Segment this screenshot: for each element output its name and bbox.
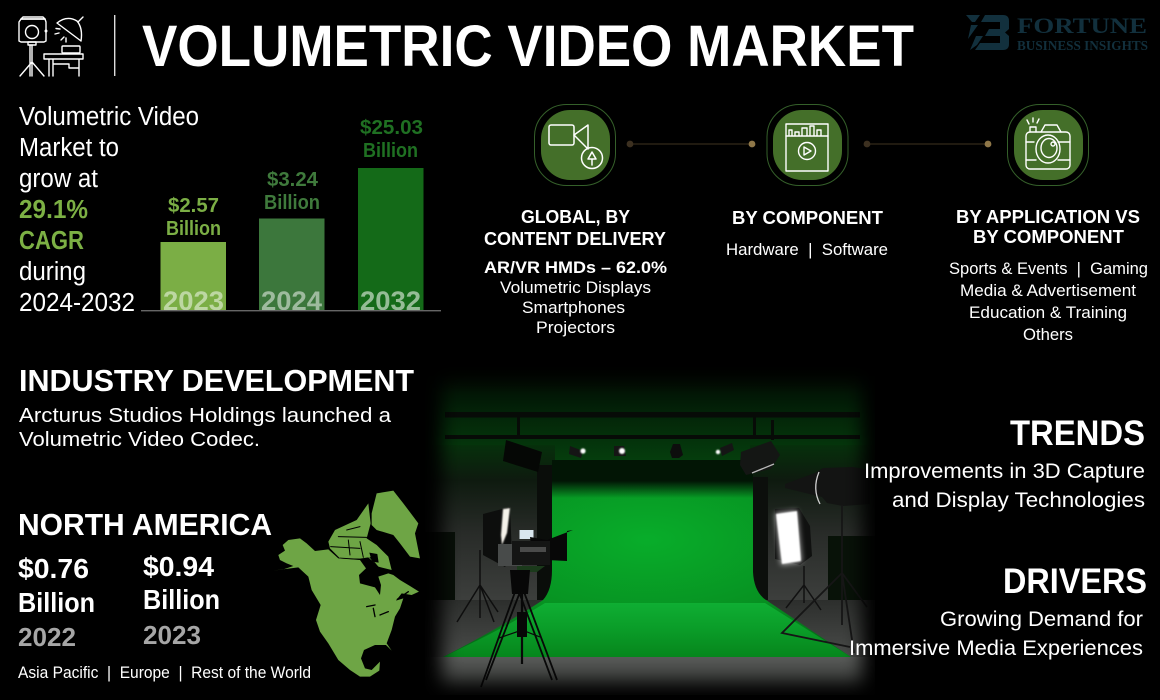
heading bbox=[484, 207, 666, 249]
list bbox=[949, 260, 1148, 344]
growth statement: 29.1% bbox=[19, 196, 88, 224]
value 2022: $0.76 bbox=[18, 553, 89, 584]
studio photo bbox=[390, 340, 920, 700]
growth statement bbox=[19, 103, 199, 317]
value 2023: Billion bbox=[143, 584, 220, 615]
heading: INDUSTRY DEVELOPMENT bbox=[19, 363, 414, 398]
logo tagline: BUSINESS INSIGHTS bbox=[1017, 38, 1148, 53]
right fresnel on stand bbox=[782, 467, 870, 653]
bar 2032 bbox=[358, 116, 424, 316]
body text: Immersive Media Experiences bbox=[849, 636, 1143, 660]
growth statement: 2024-2032 bbox=[19, 289, 135, 317]
right softbox bbox=[775, 508, 821, 610]
panel: industry development bbox=[19, 363, 414, 451]
left barn door light bbox=[503, 440, 542, 472]
value 2023: 2023 bbox=[143, 620, 201, 650]
grey floor strip bbox=[425, 657, 875, 695]
panel: drivers bbox=[849, 562, 1147, 660]
icon: photo camera bbox=[1008, 104, 1088, 186]
heading: NORTH AMERICA bbox=[18, 507, 272, 542]
connector 2 bbox=[864, 141, 991, 147]
list bbox=[484, 259, 667, 337]
bar 2023: 2023 bbox=[163, 286, 224, 316]
value 2022: 2022 bbox=[18, 622, 76, 652]
growth statement: grow at bbox=[19, 165, 98, 193]
value 2022: Billion bbox=[18, 587, 95, 618]
logo wordmark: FORTUNE bbox=[1017, 13, 1147, 38]
right cyclorama frame bbox=[752, 477, 768, 600]
body text: Arcturus Studios Holdings launched a bbox=[19, 404, 392, 427]
icon: media player bbox=[767, 104, 848, 186]
side floor bbox=[425, 600, 875, 660]
heading: BY APPLICATION VS bbox=[956, 207, 1140, 227]
other regions: Asia Pacific | Europe | Rest of the World bbox=[18, 664, 311, 682]
bar 2032: 2032 bbox=[360, 286, 421, 316]
panel: north america bbox=[18, 491, 420, 682]
list: Hardware | Software bbox=[726, 241, 888, 259]
body text: Volumetric Video Codec. bbox=[19, 428, 260, 451]
cinema camera on tripod bbox=[481, 530, 573, 687]
panel: trends bbox=[864, 414, 1145, 512]
heading: BY COMPONENT bbox=[973, 227, 1124, 247]
connector 1 bbox=[627, 141, 755, 147]
list: Media & Advertisement bbox=[960, 282, 1136, 300]
value 2023: $0.94 bbox=[143, 551, 214, 582]
map of North America bbox=[273, 491, 420, 677]
body text bbox=[849, 607, 1143, 660]
left softbox bbox=[457, 507, 512, 622]
bar 2023: $2.57 bbox=[168, 194, 219, 217]
growth statement: Market to bbox=[19, 134, 119, 162]
growth statement: during bbox=[19, 258, 86, 286]
bar 2024: Billion bbox=[264, 191, 320, 214]
title: VOLUMETRIC VIDEO MARKET bbox=[142, 14, 914, 79]
ceiling spotlights bbox=[503, 440, 780, 475]
icon: video camera bbox=[534, 104, 616, 186]
growth statement: CAGR bbox=[19, 227, 84, 255]
green screen backdrop bbox=[443, 477, 851, 657]
body text: and Display Technologies bbox=[892, 488, 1145, 512]
bar 2032: $25.03 bbox=[360, 116, 423, 139]
heading: CONTENT DELIVERY bbox=[484, 229, 666, 249]
bar 2024 bbox=[259, 168, 324, 316]
left dark wall panel bbox=[425, 532, 455, 612]
body text: Improvements in 3D Capture bbox=[864, 459, 1145, 483]
left cyclorama frame bbox=[537, 465, 553, 600]
list: Education & Training bbox=[969, 304, 1127, 322]
body text bbox=[864, 459, 1145, 512]
green floor bbox=[443, 603, 851, 657]
value 2023 bbox=[143, 551, 220, 650]
heading: BY COMPONENT bbox=[732, 208, 883, 228]
heading: TRENDS bbox=[1010, 414, 1145, 453]
bar 2023: Billion bbox=[166, 217, 221, 240]
logo mark bbox=[966, 15, 1009, 50]
left studio wall bbox=[425, 445, 555, 605]
bar 2032: Billion bbox=[363, 139, 418, 162]
logo: Fortune Business Insights bbox=[966, 13, 1148, 53]
body text: Growing Demand for bbox=[940, 607, 1143, 631]
right fresnel light bbox=[740, 441, 780, 475]
growth statement: Volumetric Video bbox=[19, 103, 199, 131]
right dark wall panel bbox=[828, 536, 875, 612]
header icon: camera, lamp and desk bbox=[19, 17, 83, 76]
list: Volumetric Displays bbox=[500, 279, 651, 297]
panel: by component bbox=[726, 104, 888, 259]
bar chart bbox=[141, 116, 441, 316]
value 2022 bbox=[18, 553, 95, 652]
list: Sports & Events | Gaming bbox=[949, 260, 1148, 278]
heading: GLOBAL, BY bbox=[521, 207, 630, 227]
upper studio green wall bbox=[425, 360, 875, 480]
list: Smartphones bbox=[522, 299, 625, 317]
list: AR/VR HMDs – 62.0% bbox=[484, 259, 667, 277]
right studio wall bbox=[750, 445, 875, 605]
bar 2024: $3.24 bbox=[267, 168, 319, 191]
heading bbox=[956, 207, 1140, 247]
bar 2023 bbox=[160, 194, 226, 316]
list: Others bbox=[1023, 326, 1073, 344]
header divider bbox=[114, 15, 115, 76]
body text bbox=[19, 404, 392, 451]
photo vignette bbox=[390, 340, 920, 700]
panel: content delivery bbox=[484, 104, 667, 337]
heading: DRIVERS bbox=[1003, 562, 1147, 601]
bar 2024: 2024 bbox=[261, 286, 322, 316]
backdrop top shade bbox=[552, 460, 753, 498]
list: Projectors bbox=[536, 319, 615, 337]
panel: by application bbox=[949, 104, 1148, 344]
overhead rods bbox=[445, 412, 860, 440]
